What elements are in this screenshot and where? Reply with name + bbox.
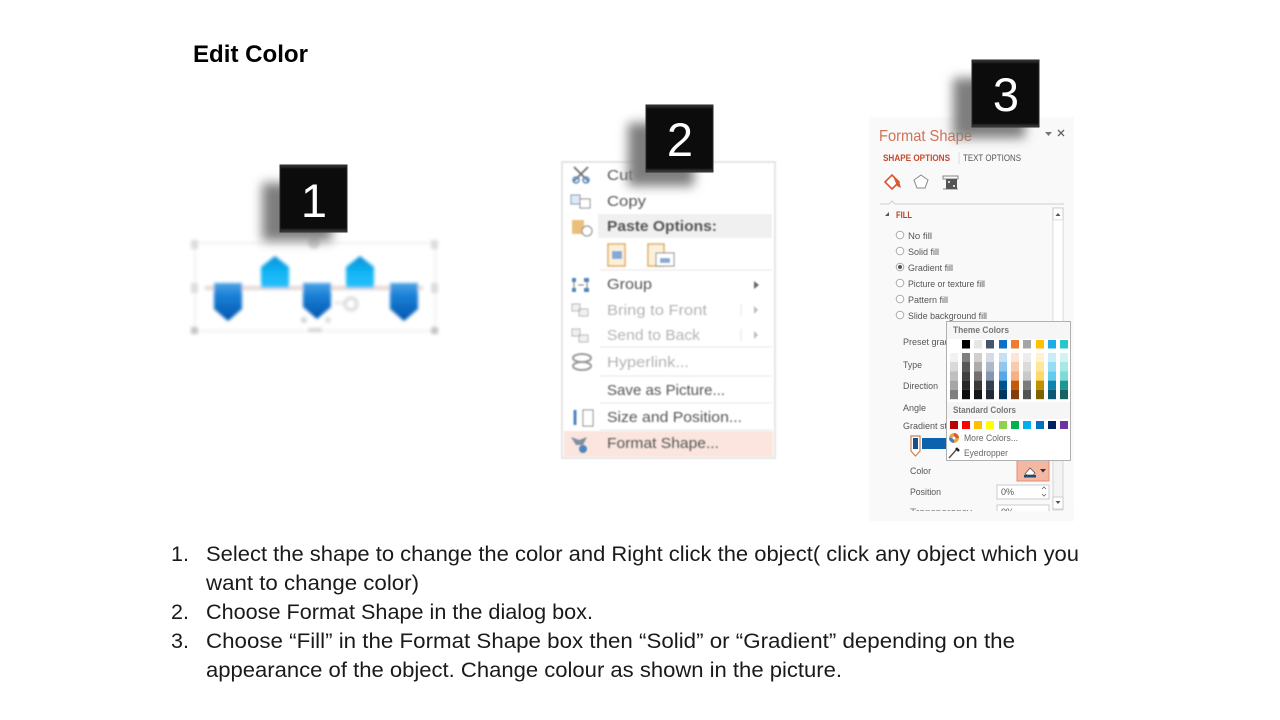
position input: 0% [1001, 507, 1014, 517]
theme colour top row [950, 340, 1068, 348]
badge 1 with shadow [262, 165, 347, 241]
numbered instructions: 1. [171, 542, 189, 566]
badge 2 with shadow [628, 105, 713, 186]
submenu arrows and separators [600, 270, 772, 430]
pane tabs [883, 152, 1021, 164]
numbered instructions: appearance of the object. Change colour as shown in the picture. [206, 658, 842, 682]
menu icons [571, 167, 674, 453]
pane heading: Format Shape [879, 128, 972, 145]
pane tabs: SHAPE OPTIONS [883, 153, 950, 163]
popup background [946, 322, 1070, 460]
menu labels: Hyperlink... [607, 354, 689, 371]
format shape highlight [564, 431, 773, 457]
badge 3 with shadow [953, 60, 1039, 138]
menu labels: Group [607, 276, 652, 293]
menu background [562, 162, 775, 458]
fill section heading [885, 210, 912, 220]
fill radio options: Gradient fill [908, 263, 953, 273]
fill section heading: FILL [896, 210, 912, 220]
standard colour row [950, 421, 1068, 429]
menu labels: Send to Back [607, 327, 701, 344]
title: Edit Color [193, 41, 308, 68]
badge 3 with shadow: 3 [993, 68, 1019, 121]
badge 1 with shadow: 1 [301, 174, 327, 227]
fill radio options: Pattern fill [908, 295, 948, 305]
menu labels: Save as Picture... [607, 382, 725, 399]
numbered instructions [171, 542, 1079, 682]
colour picker popup: Theme Colors [953, 325, 1009, 335]
numbered instructions: Choose “Fill” in the Format Shape box then “Solid” or “Gradient” depending on the [206, 629, 1015, 653]
menu labels: Bring to Front [607, 302, 708, 319]
panel: step 2 context menu [562, 162, 775, 458]
numbered instructions: 2. [171, 600, 189, 624]
panel: step 1 selected shape [191, 237, 438, 334]
pane category icons [880, 175, 1064, 204]
gradient property labels: Gradient ste [903, 421, 952, 431]
menu labels: Size and Position... [607, 409, 742, 426]
menu labels: Copy [607, 193, 647, 210]
menu labels: Cut [607, 167, 634, 184]
gradient property labels: Position [910, 487, 941, 497]
pane tabs: TEXT OPTIONS [963, 153, 1021, 163]
scrollbar [1053, 208, 1063, 510]
colour picker popup: Standard Colors [953, 405, 1016, 415]
position input [997, 485, 1049, 517]
gradient property labels: Color [910, 466, 931, 476]
fill radio options: Solid fill [908, 247, 939, 257]
position input: 0% [1001, 487, 1014, 497]
gradient property labels: Transparency [910, 507, 973, 517]
numbered instructions: want to change color) [205, 571, 419, 595]
gradient stop bar [911, 436, 948, 456]
more colors item: More Colors... [964, 433, 1018, 443]
fill radio options [896, 231, 987, 321]
numbered instructions: 3. [171, 629, 189, 653]
menu labels [607, 167, 742, 452]
gradient property labels: Preset grad [903, 337, 950, 347]
fill radio options: No fill [908, 231, 932, 241]
paste options highlight [598, 214, 772, 238]
menu labels: Format Shape... [607, 435, 719, 452]
bottom clip of pane [869, 511, 1074, 521]
gradient property labels [903, 337, 973, 517]
pane window controls [1045, 130, 1064, 136]
eyedropper item: Eyedropper [964, 448, 1008, 458]
numbered instructions: Select the shape to change the color and Right click the object( click any object which you [206, 542, 1079, 566]
theme colour shade columns [950, 353, 1068, 399]
timeline with arrow shapes [205, 256, 423, 323]
fill radio options: Picture or texture fill [908, 279, 985, 289]
menu labels: Paste Options: [607, 218, 717, 235]
gradient property labels: Type [903, 360, 922, 370]
fill radio options: Slide background fill [908, 311, 987, 321]
color button [1017, 460, 1049, 481]
theme colors heading [947, 322, 1070, 339]
panel: step 3 format shape pane [869, 117, 1074, 521]
gradient property labels: Direction [903, 381, 938, 391]
standard colors heading [947, 402, 1070, 419]
gradient property labels: Angle [903, 403, 926, 413]
badge 2 with shadow: 2 [667, 113, 693, 166]
numbered instructions: Choose Format Shape in the dialog box. [206, 600, 593, 624]
pane background [869, 117, 1074, 521]
selection frame with handles [191, 237, 438, 334]
colour picker popup [946, 322, 1070, 460]
